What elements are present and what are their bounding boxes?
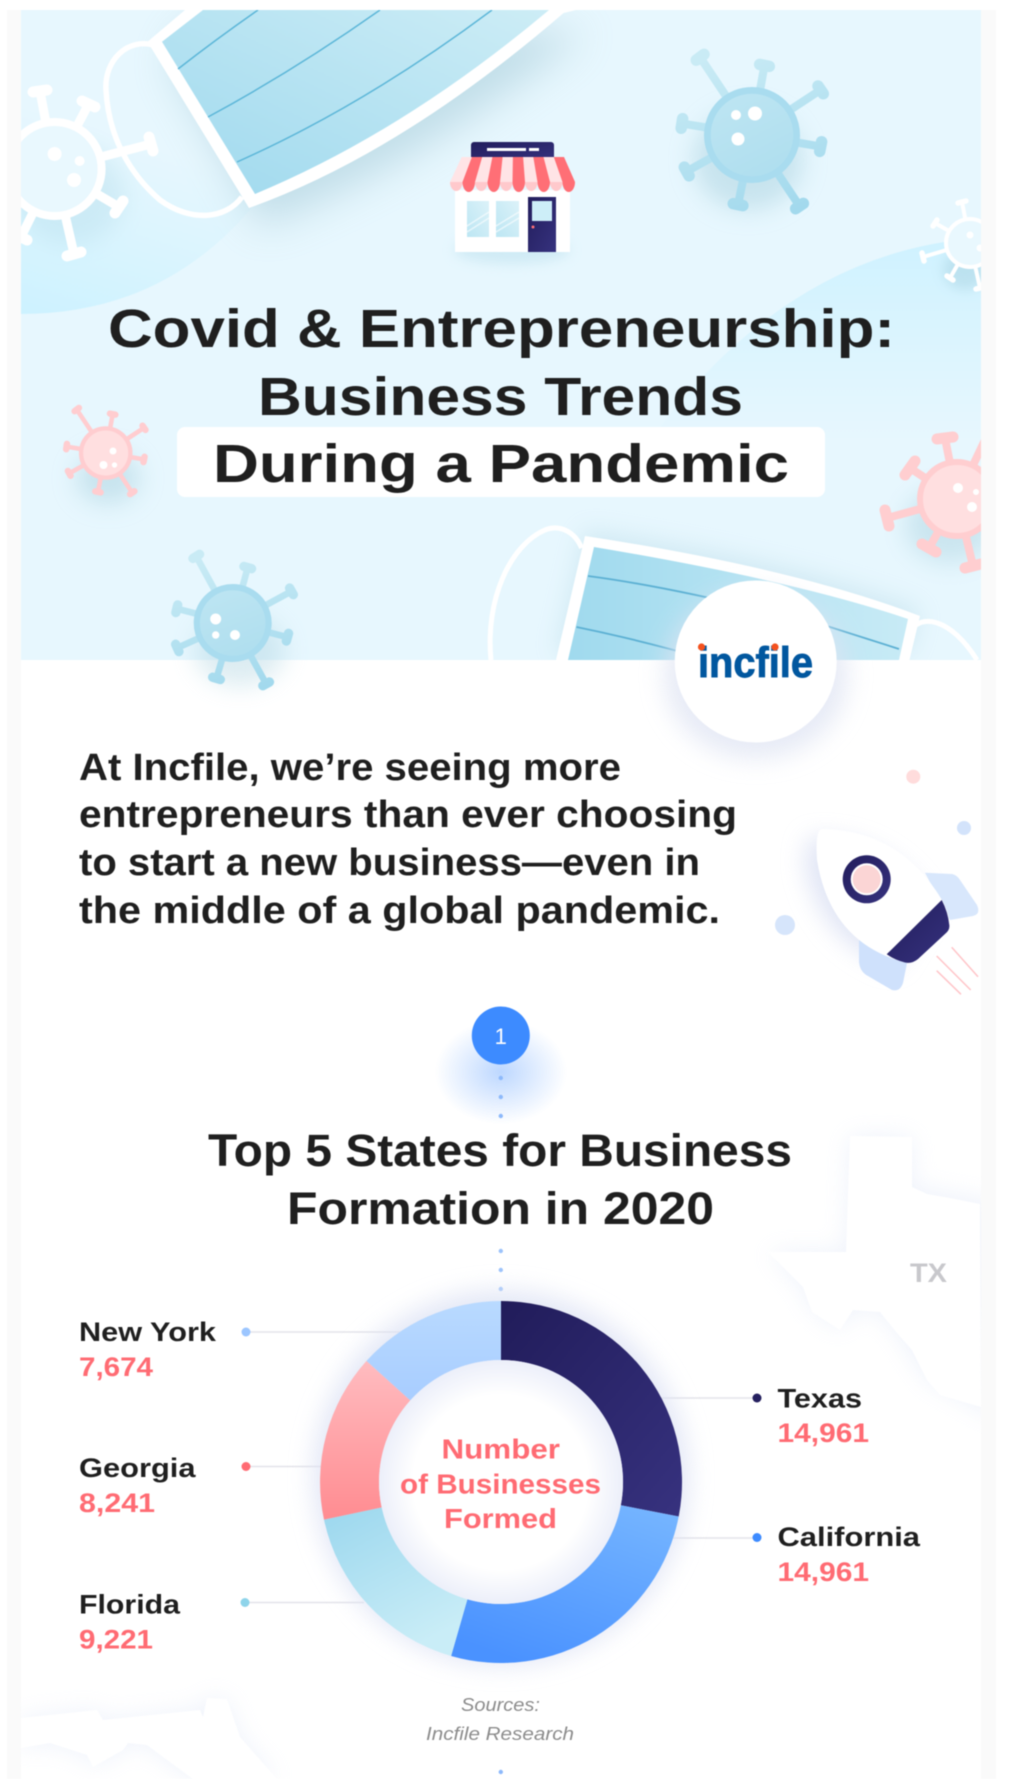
rocket body: [817, 829, 949, 963]
rocket band: [887, 900, 949, 963]
background blob left: [20, 208, 222, 314]
leader lines: [246, 1332, 757, 1602]
connector dot bottom: [499, 1770, 503, 1774]
chart: donut of businesses formed: [313, 1290, 689, 1666]
intro paragraph: entrepreneurs than ever choosing: [79, 794, 737, 836]
label: New York: New York: [79, 1317, 217, 1347]
sources note: [426, 1695, 574, 1744]
label: Georgia: 8,241: [79, 1488, 155, 1518]
segment Florida: [324, 1507, 467, 1656]
donut hole: [379, 1360, 623, 1604]
logo wordmark: incfile: [698, 639, 813, 687]
title: [108, 299, 895, 497]
map: Texas backdrop: [801, 1171, 980, 1408]
label: Georgia: [79, 1453, 250, 1518]
icon: store: [450, 142, 575, 264]
label: California: California: [778, 1522, 921, 1552]
rocket fins: [859, 873, 978, 990]
segment California: [451, 1505, 679, 1663]
intro paragraph: At Incfile, we’re seeing more: [79, 747, 621, 789]
store building: [455, 190, 570, 252]
face mask top: [106, 10, 586, 227]
store door: [528, 197, 556, 252]
face mask bottom: [490, 528, 977, 660]
intro paragraph: to start a new business—even in: [79, 842, 700, 884]
center label: of Businesses: [400, 1468, 601, 1500]
state label TX: TX: [910, 1258, 947, 1288]
virus white top right: [922, 201, 994, 290]
sources note: Sources:: [461, 1695, 540, 1715]
virus pink right: [885, 437, 995, 568]
title highlight pill: [177, 427, 825, 497]
map: Florida backdrop: [50, 1704, 204, 1756]
virus white left: [8, 90, 153, 256]
label: Texas: [752, 1384, 869, 1448]
step marker 1: [435, 1006, 567, 1124]
background blob right: [710, 242, 981, 371]
label: Florida: [79, 1590, 250, 1654]
virus blue bottom left: [170, 553, 296, 688]
connector dots: [499, 1076, 503, 1118]
label: New York: [79, 1317, 250, 1382]
store windows: [467, 201, 519, 237]
rocket window: [843, 855, 891, 903]
heading: top 5 states: Top 5 States for Business: [208, 1125, 792, 1176]
logo: incfile badge: [664, 580, 848, 759]
center label: Number: [442, 1434, 560, 1464]
virus blue top right: [681, 54, 823, 210]
label: Florida: 9,221: [79, 1624, 153, 1654]
label: New York: 7,674: [79, 1352, 153, 1382]
intro paragraph: the middle of a global pandemic.: [79, 890, 720, 932]
label: California: 14,961: [778, 1557, 869, 1587]
decorative dots: [775, 770, 971, 935]
step marker 1: 1: [495, 1024, 507, 1049]
intro paragraph: [79, 747, 737, 932]
heading: top 5 states: Formation in 2020: [287, 1183, 714, 1234]
segment Georgia: [320, 1361, 410, 1520]
icon: rocket: [775, 770, 978, 994]
rocket exhaust: [937, 947, 978, 994]
label: Georgia: Georgia: [79, 1453, 197, 1483]
segment New York: [366, 1301, 501, 1400]
title line 2: Business Trends: [258, 367, 743, 427]
heading: top 5 states: [208, 1125, 792, 1234]
virus pink left: [66, 408, 145, 504]
title line 1: Covid & Entrepreneurship:: [108, 299, 895, 359]
label: Florida: Florida: [79, 1590, 181, 1620]
store awning: [450, 157, 575, 192]
connector dots to chart: [499, 1249, 503, 1291]
label: California: [752, 1522, 921, 1587]
center label: Formed: [444, 1503, 557, 1534]
sources note: Incfile Research: [426, 1724, 574, 1744]
store sign: [471, 142, 554, 160]
title line 3: During a Pandemic: [213, 434, 789, 494]
label: Texas: Texas: [778, 1384, 862, 1414]
panel: hero: [8, 10, 995, 660]
label: Texas: 14,961: [778, 1418, 869, 1448]
segment Texas: [501, 1301, 682, 1516]
center label: [400, 1434, 601, 1534]
